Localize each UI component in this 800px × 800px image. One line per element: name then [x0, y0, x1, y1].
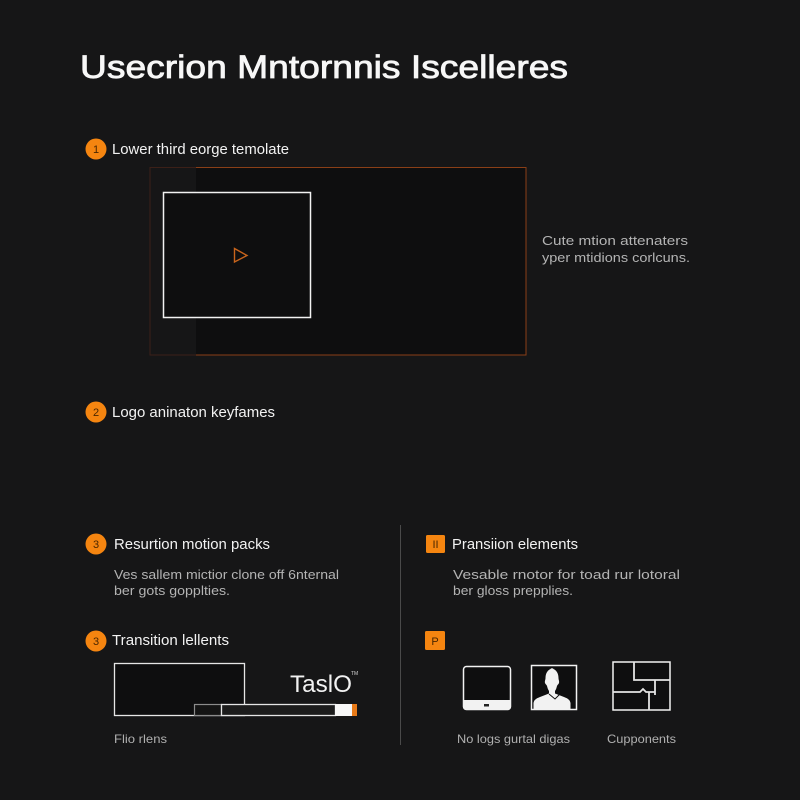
- side note: [542, 233, 690, 265]
- side note: Cute mtion attenaters: [542, 233, 689, 248]
- badge 2: [86, 402, 106, 422]
- badge 1: 1: [93, 144, 99, 156]
- badge 4: [426, 535, 445, 553]
- icon: person portrait: [532, 666, 576, 710]
- heading 3: Resurtion motion packs: [114, 537, 270, 553]
- badge 4: II: [432, 539, 439, 551]
- heading 1: Lower third eorge temolate: [112, 142, 289, 158]
- section 3: resartion motion packs: [86, 534, 339, 598]
- badge 2: 2: [93, 407, 99, 419]
- lower third graphic: [114, 664, 358, 716]
- inner preview box: [164, 192, 310, 318]
- caption: flio rlens: Flio rlens: [114, 732, 167, 746]
- panel: video frame: [150, 167, 526, 355]
- badge 1: [86, 138, 106, 160]
- body text 4: [453, 567, 680, 598]
- title: Usecrion Mntornnis Iscelleres: [80, 49, 568, 85]
- logo wordmark: TM: [351, 671, 358, 677]
- body text 4: Vesable rnotor for toad rur lotoral: [453, 567, 680, 582]
- heading 4: Pransiion elements: [452, 537, 578, 553]
- section 2: logo animation keyframes: [86, 402, 275, 422]
- badge 3: 3: [93, 539, 99, 551]
- section 1: lower third template: [86, 138, 690, 355]
- section 4: pransition elements: [426, 535, 680, 598]
- timeline bar: [194, 704, 357, 716]
- badge 5: 3: [93, 636, 99, 648]
- heading 2: Logo aninaton keyfames: [112, 405, 275, 421]
- side note: yper mtidions corlcuns.: [542, 250, 690, 265]
- section 6: components: [425, 631, 676, 746]
- badge P: P: [431, 636, 439, 648]
- caption: no logs: No logs gurtal digas: [457, 732, 570, 746]
- body text 3: [114, 567, 339, 598]
- icon: play triangle: [234, 248, 247, 262]
- body text 3: Ves sallem mictior clone off 6nternal: [114, 567, 339, 582]
- caption: components: Cupponents: [607, 732, 676, 746]
- badge 3: [86, 534, 106, 554]
- badge P: [425, 631, 445, 650]
- body text 3: ber gots gopplties.: [114, 583, 230, 598]
- icon: tablet: [463, 666, 511, 710]
- body text 4: ber gloss prepplies.: [453, 583, 573, 598]
- vertical divider: [400, 525, 401, 745]
- badge 5: [86, 630, 106, 652]
- logo wordmark: TaslO: [290, 671, 352, 698]
- section 5: transition lellents: [86, 630, 358, 746]
- icon: floor plan grid: [613, 662, 670, 710]
- heading 5: Transition lellents: [112, 633, 229, 649]
